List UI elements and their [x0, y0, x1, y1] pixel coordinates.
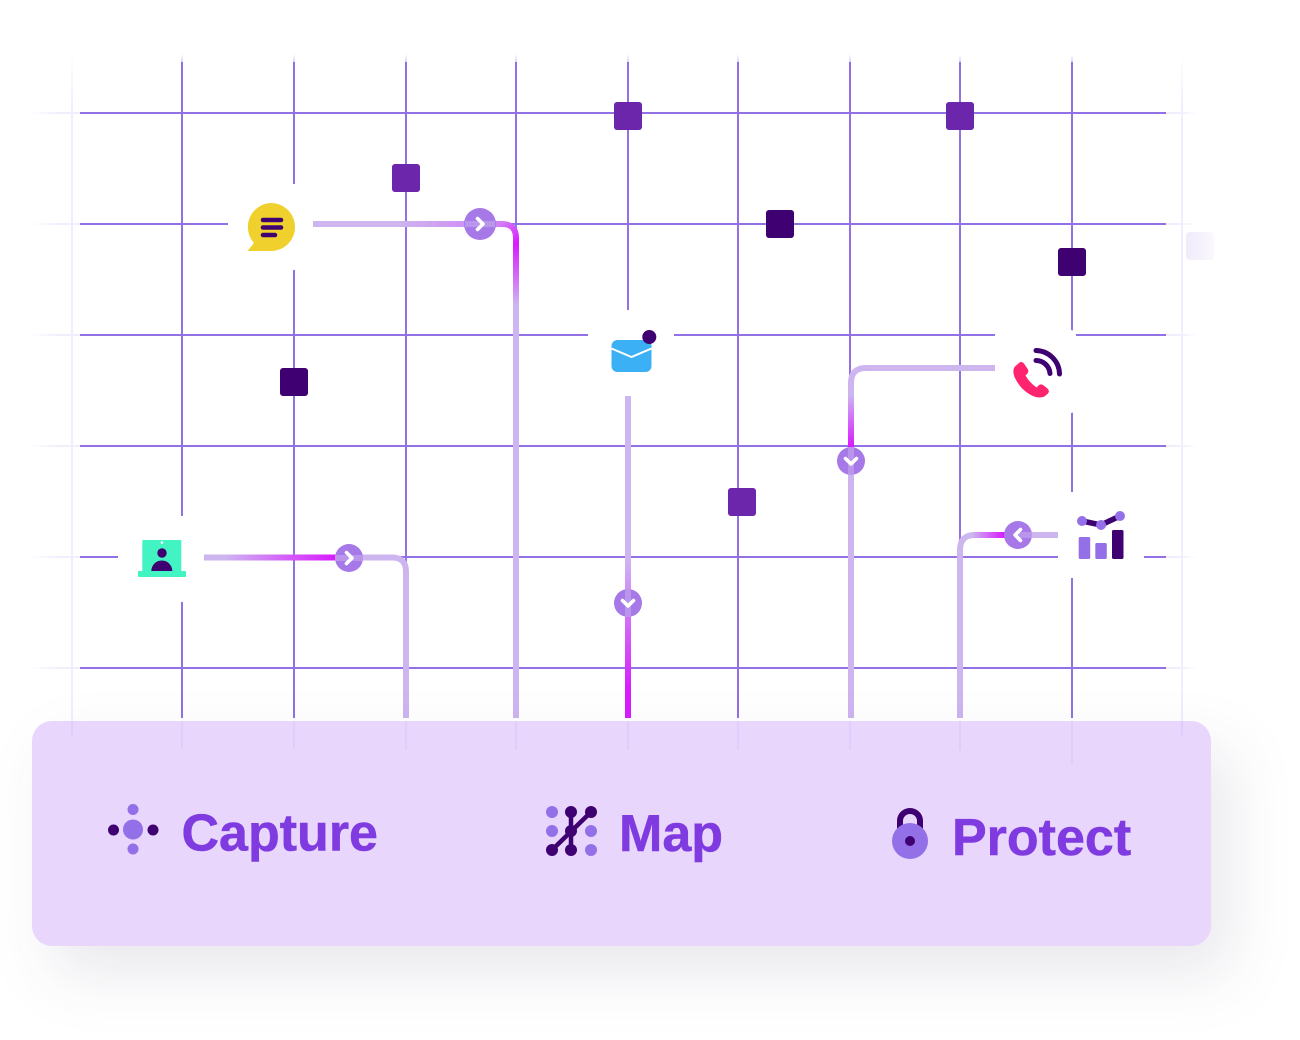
- icon: laptop with person: [138, 540, 186, 577]
- panel: capture, map, protect: [32, 721, 1211, 946]
- connector: phone to bottom panel: [851, 368, 995, 718]
- icon: protect padlock: [892, 811, 928, 859]
- icon: map: [546, 806, 597, 856]
- icon halos clearing the grid: [118, 184, 1144, 602]
- connector: mail to bottom panel: [625, 396, 631, 718]
- arrow button: right on chat line: [464, 208, 496, 240]
- arrow button: right on laptop line: [335, 544, 363, 572]
- icon: capture: [108, 804, 158, 854]
- label: Protect: Protect: [952, 809, 1131, 867]
- connector: laptop to bottom panel: [204, 558, 406, 718]
- label: Capture: Capture: [182, 804, 378, 862]
- data node squares: [280, 102, 1214, 516]
- arrow button: down on phone line: [837, 447, 865, 475]
- icon: mail envelope with notification: [612, 330, 656, 372]
- background grid: [30, 52, 1198, 737]
- connector: chart to bottom panel: [960, 535, 1058, 718]
- label: Map: Map: [619, 805, 723, 863]
- arrow button: left on chart line: [1004, 521, 1032, 549]
- arrow button: down on mail line: [614, 589, 642, 617]
- icon: phone ringing: [1013, 350, 1060, 398]
- connector: chat to bottom panel: [313, 224, 516, 718]
- icon: chat bubble: [248, 203, 295, 251]
- icon: bar and line chart: [1077, 511, 1125, 559]
